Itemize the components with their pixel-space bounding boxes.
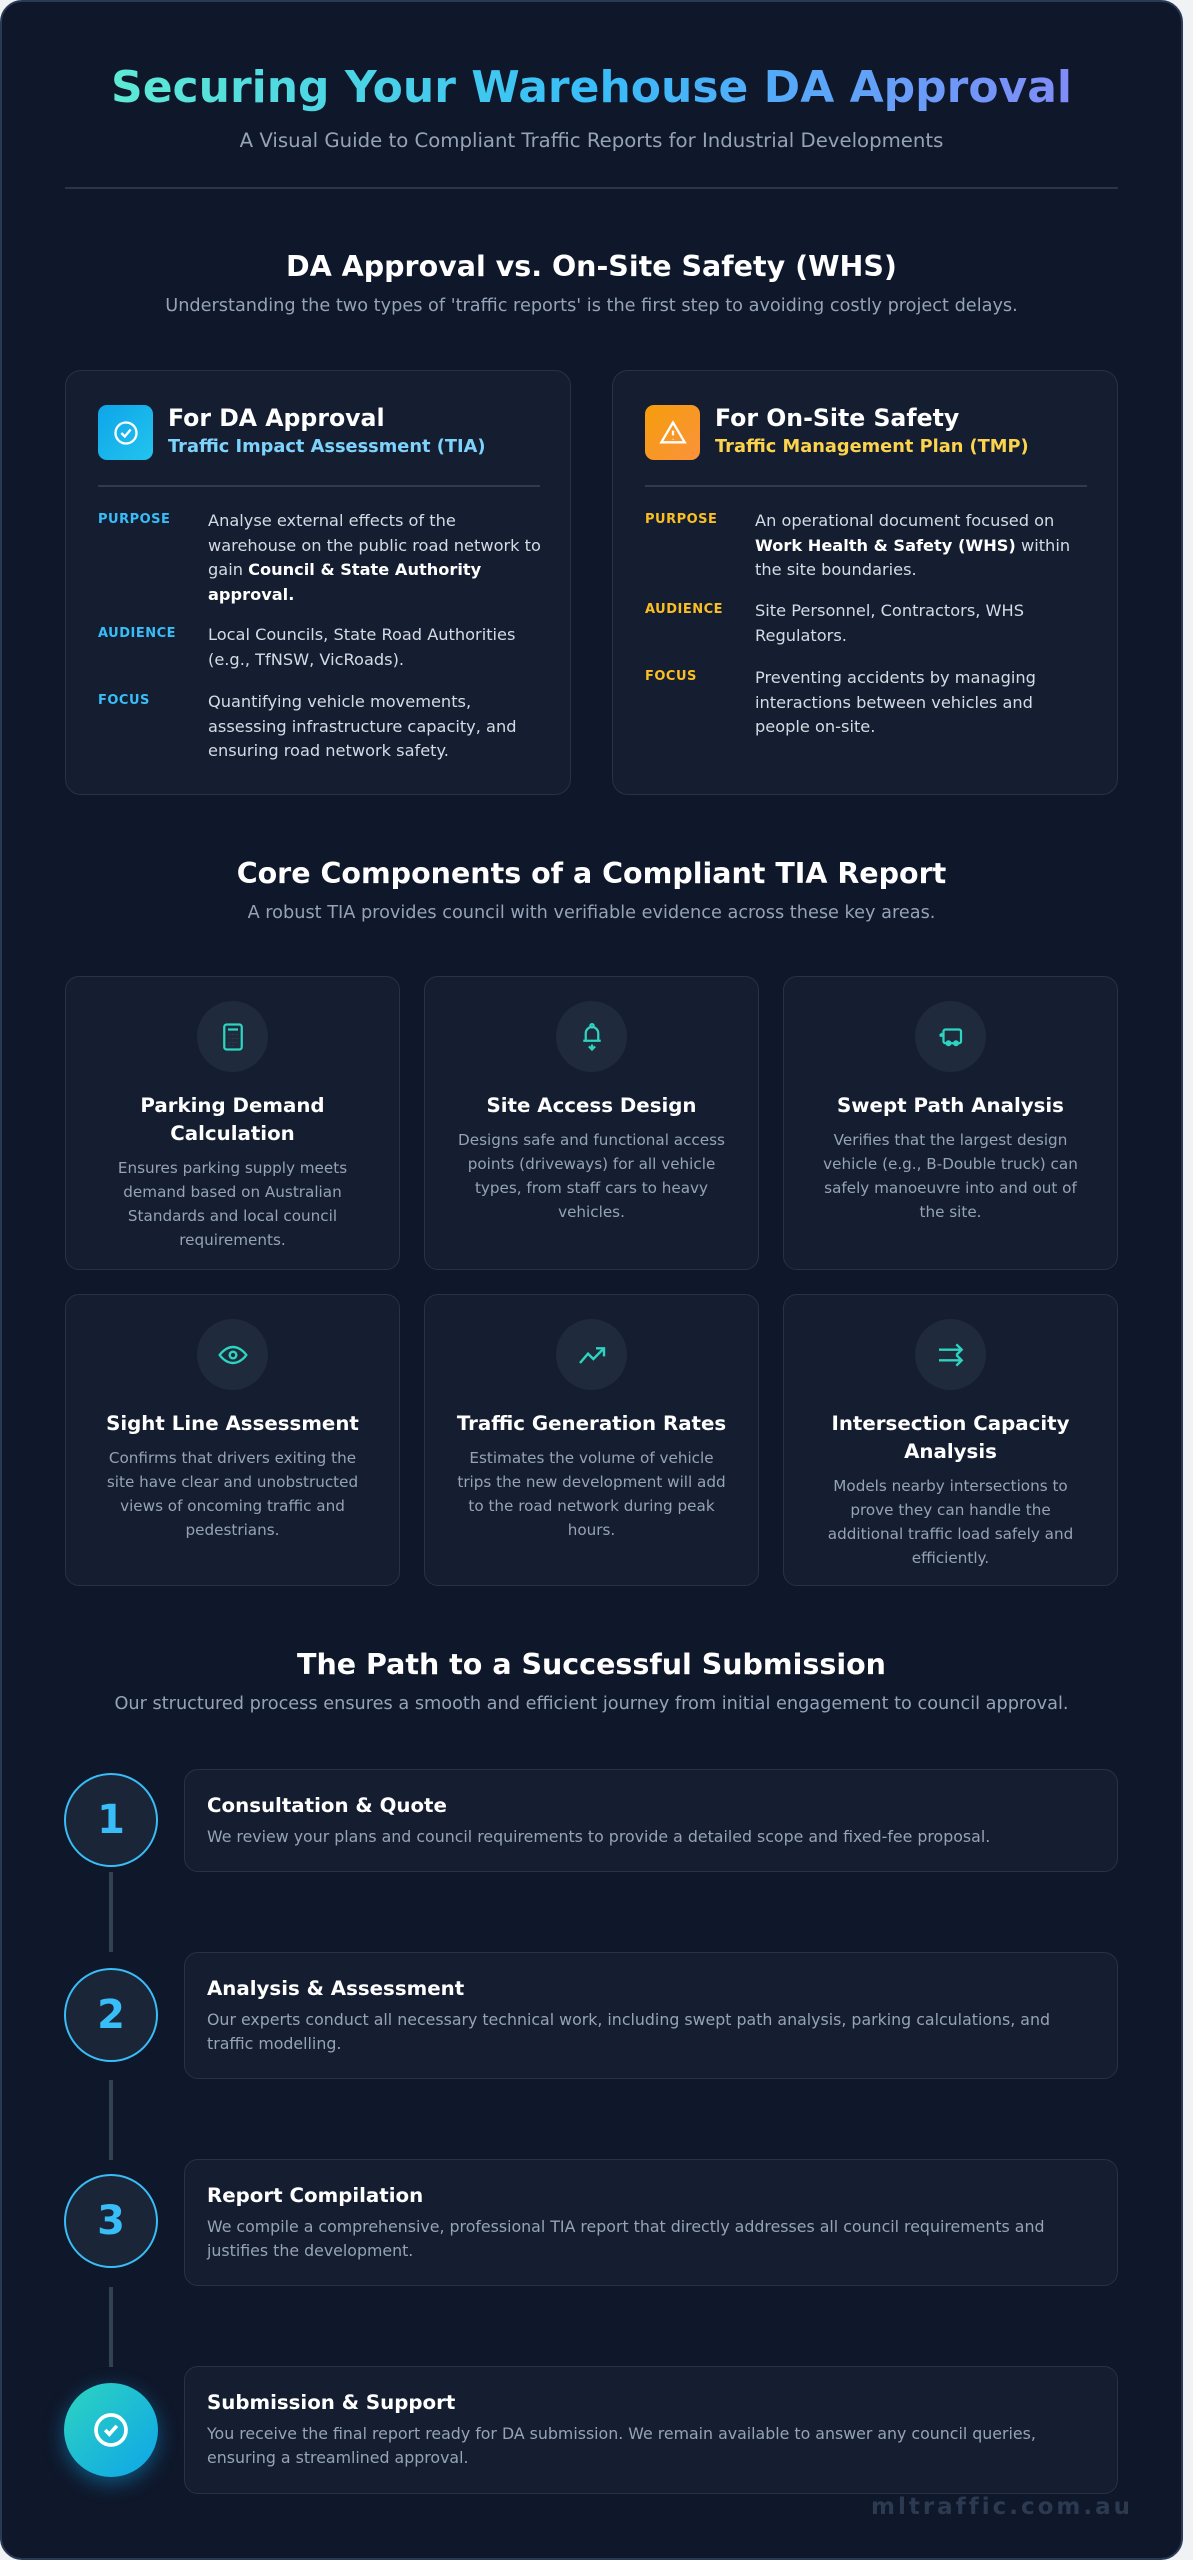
component: traffic generation: Estimates the volume of vehicle trips the new development will add to the road network during peak hours. <box>457 1449 726 1539</box>
label purpose: PURPOSE <box>645 512 717 527</box>
step 1 card <box>184 1769 1118 1872</box>
step 2 card: Analysis & Assessment <box>207 1977 464 2000</box>
icon: calculator <box>197 1001 268 1072</box>
component: site access <box>424 976 759 1270</box>
component: parking: Parking Demand Calculation <box>140 1094 325 1145</box>
card title: For DA Approval <box>168 404 385 432</box>
label audience: AUDIENCE <box>98 626 176 641</box>
step 4 card: You receive the final report ready for DA submission. We remain available to answer any council queries, ensuring a streamlined approval. <box>207 2424 1036 2467</box>
component: sight line: Sight Line Assessment <box>106 1412 359 1435</box>
icon: arrows <box>915 1319 986 1390</box>
component: intersection: Models nearby intersections to prove they can handle the additional traffic load safely and efficiently. <box>828 1477 1073 1567</box>
step 1 card: Consultation & Quote <box>207 1794 447 1817</box>
icon: warning <box>645 405 700 460</box>
panel: DA approval <box>65 370 571 795</box>
step 2 marker: 2 <box>97 1992 125 2038</box>
section subtitle: A robust TIA provides council with verifiable evidence across these key areas. <box>248 903 935 923</box>
text audience: Site Personnel, Contractors, WHS Regulators. <box>755 601 1024 644</box>
label focus: FOCUS <box>98 693 150 708</box>
icon: check <box>98 405 153 460</box>
text purpose: Analyse external effects of the warehouse on the public road network to gain Council & State Authority approval. <box>208 511 541 604</box>
step 3 card: Report Compilation <box>207 2184 423 2207</box>
step 3 card <box>184 2159 1118 2286</box>
component: swept path <box>783 976 1118 1270</box>
subtitle: A Visual Guide to Compliant Traffic Reports for Industrial Developments <box>240 129 943 152</box>
component: swept path: Verifies that the largest design vehicle (e.g., B-Double truck) can safely manoeuvre into and out of the site. <box>823 1131 1078 1221</box>
text audience: Local Councils, State Road Authorities (e.g., TfNSW, VicRoads). <box>208 625 515 668</box>
component: swept path: Swept Path Analysis <box>837 1094 1064 1117</box>
card title: For On-Site Safety <box>715 404 959 432</box>
component: intersection <box>783 1294 1118 1586</box>
component: parking: Ensures parking supply meets demand based on Australian Standards and local council requirements. <box>118 1159 347 1249</box>
section subtitle: Our structured process ensures a smooth and efficient journey from initial engagement to council approval. <box>114 1694 1068 1714</box>
step 1 marker: 1 <box>97 1797 125 1843</box>
text focus: Preventing accidents by managing interactions between vehicles and people on-site. <box>755 668 1036 736</box>
section heading: core components: Core Components of a Compliant TIA Report <box>237 857 946 890</box>
component: sight line: Confirms that drivers exiting the site have clear and unobstructed views of oncoming traffic and pedestrians. <box>107 1449 358 1539</box>
section heading: path: The Path to a Successful Submission <box>297 1648 886 1681</box>
component: traffic generation <box>424 1294 759 1586</box>
step 4 marker: check <box>64 2383 158 2477</box>
card subtitle: Traffic Management Plan (TMP) <box>715 436 1029 457</box>
step 2 card: Our experts conduct all necessary technical work, including swept path analysis, parking calculations, and traffic modelling. <box>207 2010 1050 2053</box>
component: site access: Designs safe and functional access points (driveways) for all vehicle types, from staff cars to heavy vehicles. <box>458 1131 725 1221</box>
component: sight line <box>65 1294 400 1586</box>
section heading: DA vs WHS: DA Approval vs. On-Site Safety (WHS) <box>286 250 897 283</box>
component: traffic generation: Traffic Generation Rates <box>457 1412 726 1435</box>
step 1 marker <box>64 1773 158 1867</box>
label focus: FOCUS <box>645 669 697 684</box>
watermark: mltraffic.com.au <box>871 2494 1133 2520</box>
step 3 marker: 3 <box>97 2198 125 2244</box>
step 3 card: We compile a comprehensive, professional TIA report that directly addresses all council requirements and justifies the development. <box>207 2217 1044 2260</box>
icon: trend <box>556 1319 627 1390</box>
text focus: Quantifying vehicle movements, assessing infrastructure capacity, and ensuring road network safety. <box>208 692 517 760</box>
component: intersection: Intersection Capacity Analysis <box>831 1412 1070 1463</box>
section subtitle: Understanding the two types of 'traffic reports' is the first step to avoiding costly project delays. <box>165 296 1018 316</box>
card subtitle: Traffic Impact Assessment (TIA) <box>168 436 485 457</box>
icon: access <box>556 1001 627 1072</box>
icon: eye <box>197 1319 268 1390</box>
step 4 card: Submission & Support <box>207 2391 455 2414</box>
icon: truck <box>915 1001 986 1072</box>
panel: on-site safety <box>612 370 1118 795</box>
step 1 card: We review your plans and council requirements to provide a detailed scope and fixed-fee proposal. <box>207 1827 990 1846</box>
step 3 marker <box>64 2174 158 2268</box>
component: parking <box>65 976 400 1270</box>
label purpose: PURPOSE <box>98 512 170 527</box>
step 2 marker <box>64 1968 158 2062</box>
step 2 card <box>184 1952 1118 2079</box>
step 4 card <box>184 2366 1118 2494</box>
text purpose: An operational document focused on Work Health & Safety (WHS) within the site boundaries. <box>755 511 1070 579</box>
label audience: AUDIENCE <box>645 602 723 617</box>
title: Securing Your Warehouse DA Approval <box>111 62 1072 113</box>
component: site access: Site Access Design <box>486 1094 697 1117</box>
